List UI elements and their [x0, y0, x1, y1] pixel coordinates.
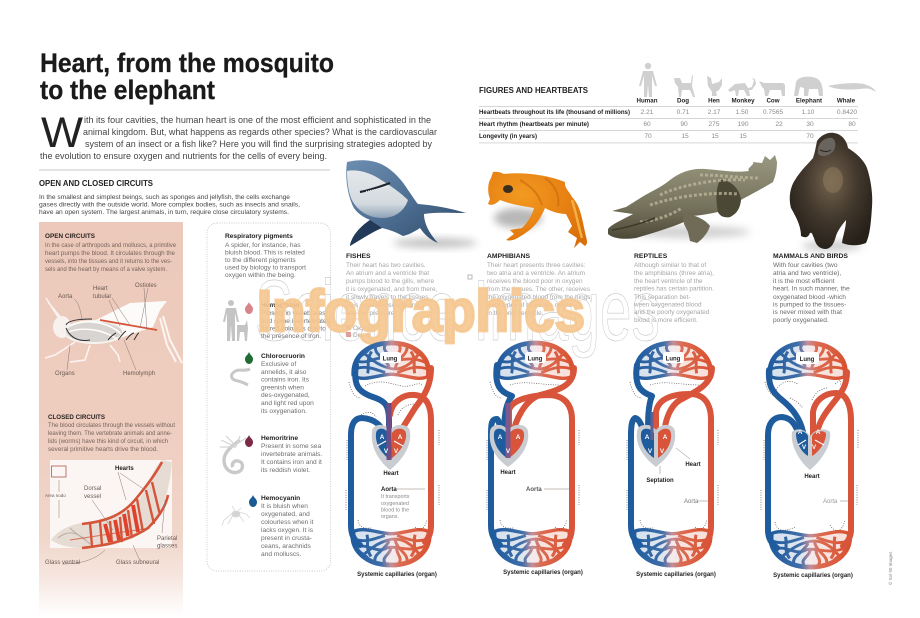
row: longevity: 15 [739, 133, 747, 140]
text block: mammals and birds: is pumped to the tissues- [773, 302, 846, 308]
text block: fishes [346, 253, 438, 317]
photo: gorilla [790, 133, 872, 251]
row: longevity: 15 [711, 133, 719, 140]
text block: amphibians: Both types of blood are mixed [487, 302, 572, 309]
intro paragraph: animal kingdom. But, what happens as regards other species? What is the cardiovascular [83, 127, 438, 138]
text block: mammals and birds: oxygenated blood -which [773, 294, 846, 301]
icon: hemoglobin drop [245, 302, 253, 314]
diagram: mammal circulation [761, 343, 858, 579]
text block: amphibians: the oxygenated blood from the lungs. [487, 294, 592, 301]
label: aorta: Aorta [526, 487, 542, 493]
label: lung: Lung [800, 357, 815, 363]
text block: fishes: This system is simple and [346, 302, 420, 309]
heading: figures and heartbeats: FIGURES AND HEARTBEATS [479, 86, 589, 95]
row: heart rhythm: 22 [775, 121, 783, 128]
label: lung [525, 352, 546, 363]
heading: closed circuits: CLOSED CIRCUITS [48, 414, 106, 421]
text block: open circuits: vessels, into the tissues and it returns to the ves- [45, 258, 172, 265]
labels: earthworm: Dorsal [84, 486, 101, 492]
text block: circuits intro: gases directly with the outside world. More complex bodies, such as insects and snails, [39, 202, 300, 208]
text block: reptiles [633, 253, 714, 324]
text block: hemoglobin: Hemoglobin [261, 302, 299, 309]
text block: chlorocruorin: greenish when [261, 384, 304, 392]
label: aorta: organs. [381, 514, 399, 520]
text block: hemoglobin [261, 302, 332, 340]
diagram: reptile circulation [627, 343, 718, 578]
text block: fishes: Their heart has two cavities. [346, 262, 426, 269]
row: heartbeats throughout life: 0.8420 [837, 109, 857, 116]
watermark [255, 263, 660, 359]
heart: mammal: V [802, 444, 807, 451]
row: longevity: 70 [806, 133, 814, 140]
icon: chlorocruorin drop [245, 352, 253, 364]
text block: open circuits: heart pumps the blood. It circulates through the [45, 250, 175, 257]
row: heart rhythm: 60 [643, 121, 651, 128]
row: longevity: 15 [681, 133, 689, 140]
labels: earthworm: Parietal [157, 536, 177, 542]
legend: Deoxy [353, 332, 372, 339]
title: Heart, from the mosquito [40, 48, 334, 78]
diagram: amphibian circulation [487, 343, 583, 576]
text block: hemocyanin: and molluscs. [261, 551, 301, 558]
label: aorta [526, 487, 569, 493]
text block: reptiles: REPTILES [634, 253, 668, 260]
text block: hemoritrine: its reddish violet. [261, 467, 310, 474]
row: longevity: Longevity (in years) [479, 133, 537, 140]
text block: closed circuits: several primitive hearts drive the blood. [48, 446, 158, 453]
text block: mammals and birds: MAMMALS AND BIRDS [773, 253, 848, 260]
text block: reptiles: Although similar to that of [634, 262, 706, 269]
photo: crocodile [608, 155, 777, 243]
intro paragraph: system of an insect or a fish like? Here you will find the surprising strategies adopted by [85, 139, 432, 150]
label: heart: Heart [383, 471, 399, 477]
text block: hemoritrine: It contains iron and it [261, 459, 322, 466]
heart: reptile: V [648, 448, 653, 455]
column headers: Monkey [731, 98, 755, 104]
label: aorta: Aorta [823, 499, 838, 505]
text block: mammals and birds: heart. In such manner, the [773, 286, 850, 292]
column headers: Whale [837, 98, 856, 104]
title [40, 48, 334, 105]
column headers: Dog [677, 98, 689, 104]
labels: grasshopper [55, 283, 157, 377]
heart: mammal: A [798, 429, 803, 436]
text block: hemoglobin: Its red colour is due to [261, 326, 326, 332]
text block: hemocyanin: Hemocyanin [261, 495, 300, 502]
row: heartbeats throughout life: 2.17 [708, 109, 721, 116]
row: heart rhythm: 275 [708, 121, 720, 128]
labels: earthworm: vessel [84, 494, 101, 500]
text block: hemoritrine [261, 435, 322, 474]
arrows: flow [627, 382, 718, 530]
label: heart: Heart [804, 474, 820, 480]
label: aorta: Aorta [684, 499, 699, 505]
text block: chlorocruorin: contains iron. Its [261, 376, 310, 384]
text block: hemocyanin: present in crusta- [261, 535, 312, 542]
text block: respiratory pigments [225, 233, 306, 279]
label: aorta: It transports [381, 494, 410, 500]
column headers: Cow [766, 98, 780, 104]
intro paragraph [40, 109, 438, 162]
heart: fish: V [394, 448, 399, 455]
row: heart rhythm: 190 [737, 121, 749, 128]
heart: mammal: A [816, 429, 821, 436]
icon: marine worm silhouette [220, 436, 246, 472]
labels: grasshopper: Aorta [58, 294, 73, 300]
text block: respiratory pigments: A spider, for instance, has [225, 242, 301, 249]
text block: respiratory pigments: to the different pigments [225, 257, 296, 264]
icon: hemocyanin drop [249, 495, 257, 507]
labels: grasshopper: Hemolymph [123, 371, 155, 377]
label: aorta [684, 499, 710, 505]
text block: reptiles: This separation bet- [634, 294, 690, 301]
arrows: flow [346, 382, 439, 530]
heart: fish: V [384, 448, 389, 455]
icon: human and dog silhouette [223, 300, 248, 341]
heart: fish: A [380, 434, 385, 441]
text block: fishes: An atrium and a ventricle that [346, 270, 429, 277]
text block: open circuits [45, 242, 176, 273]
text block: amphibians: from the tissues. The other, receives [487, 286, 590, 293]
title: to the elephant [40, 75, 215, 105]
icon: small marker [468, 275, 472, 279]
text block: open circuits: sels and the heart by means of a valve system. [45, 266, 167, 273]
label: lung [663, 352, 684, 363]
text block: chlorocruorin: annelids, it also [261, 369, 307, 376]
row: longevity [479, 133, 814, 140]
label: septation: Septation [646, 478, 674, 484]
credit: © Sol 90 Images [887, 551, 893, 585]
row: longevity: 70 [644, 133, 652, 140]
label: systemic capillaries: Systemic capillaries (organ) [773, 573, 853, 579]
heart: reptile: A [645, 434, 650, 441]
legend: Oxygen [353, 325, 375, 332]
text block: amphibians: Their heart presents three cavities: [487, 262, 586, 269]
heart: reptile: A [663, 434, 668, 441]
text block: chlorocruorin: and light red upon [261, 400, 314, 407]
column headers: Hen [708, 98, 720, 104]
icons: animal silhouettes [639, 63, 876, 97]
text block: mammals and birds: poorly oxygenated. [773, 317, 829, 324]
labels: earthworm: Area nodo [45, 493, 66, 498]
text block: hemoglobin: Present in vertebrates [261, 310, 326, 317]
row: heart rhythm: 80 [848, 121, 856, 128]
text block: hemoritrine: Hemoritrine [261, 435, 298, 442]
row: heartbeats throughout life: 0.71 [677, 109, 690, 116]
heart: amphibian: A [498, 434, 503, 441]
row: heartbeats throughout life: 1.50 [736, 109, 749, 116]
column headers [637, 98, 856, 104]
text block: chlorocruorin: Chlorocruorin [261, 353, 305, 360]
label: heart [676, 448, 701, 468]
labels: grasshopper: Heart [93, 286, 108, 292]
text block: circuits intro: have an open system. The largest animals, in turn, require close circulatory systems. [39, 209, 289, 216]
text block: reptiles: blood is more efficient. [634, 317, 698, 324]
text block: closed circuits: leaving them. The vertebrate animals and anne- [48, 430, 172, 437]
text block: fishes: has low pressure. [346, 310, 396, 317]
text block: closed circuits [48, 422, 175, 453]
text block: hemocyanin [261, 495, 314, 558]
text block: hemocyanin: lacks oxygen. It is [261, 527, 314, 534]
row: heartbeats throughout life [479, 109, 857, 116]
text block: mammals and birds: is never mixed with that [773, 309, 842, 316]
labels: earthworm: Glass subneural [116, 560, 159, 566]
text block: amphibians: AMPHIBIANS [487, 253, 531, 260]
row: heart rhythm: 90 [680, 121, 688, 128]
text block: chlorocruorin: Exclusive of [261, 361, 296, 368]
text block: closed circuits: The blood circulates through the vessels without [48, 422, 175, 429]
text block: respiratory pigments: Respiratory pigments [225, 233, 293, 240]
text block: hemocyanin: It is bluish when [261, 503, 308, 510]
text block: fishes: it slowly travels to the tissues. [346, 294, 430, 301]
text block: reptiles: reptiles has certain partition. [634, 286, 714, 292]
label: aorta: Aorta [381, 487, 397, 493]
label: systemic capillaries: Systemic capillaries (organ) [357, 572, 437, 578]
labels: earthworm: Hearts [115, 466, 134, 472]
text block: hemoglobin: the presence of iron. [261, 333, 321, 340]
labels: earthworm: glasses [157, 544, 177, 550]
column headers: Elephant [796, 98, 822, 104]
diagram: fish circulation [346, 343, 439, 578]
text block: mammals and birds: With four cavities (two [773, 262, 838, 269]
text block: hemocyanin: colourless when it [261, 519, 314, 526]
heading: open and closed circuits: OPEN AND CLOSED CIRCUITS [39, 179, 154, 188]
label: aorta: oxygenated [381, 501, 409, 507]
text block: amphibians: in the only ventricle. [487, 310, 544, 317]
legend [346, 325, 375, 339]
text block: circuits intro: In the smallest and simplest beings, such as sponges and jellyfish, the cells exchange [39, 194, 290, 201]
heart: amphibian: V [506, 448, 511, 455]
text block: hemoglobin: and some invertebrates. [261, 318, 332, 325]
text block: hemoritrine: Present in some sea [261, 443, 321, 450]
row: heart rhythm: Heart rhythm (heartbeats per minute) [479, 121, 589, 128]
intro paragraph: the evolution to ensure oxygen and nutrients for the cells of every being. [40, 151, 327, 162]
label: lung [380, 352, 401, 363]
text block: respiratory pigments: bluish blood. This is related [225, 250, 305, 256]
text block: hemoritrine: invertebrate animals. [261, 451, 322, 458]
label: systemic capillaries: Systemic capillaries (organ) [636, 572, 716, 578]
labels: grasshopper: Ostioles [135, 283, 157, 289]
heart: fish: A [398, 434, 403, 441]
heart: amphibian [490, 403, 528, 467]
icon: detail box [52, 466, 66, 477]
row: heart rhythm: 30 [806, 121, 814, 128]
text block: respiratory pigments: oxygen within the being. [225, 272, 296, 279]
label: systemic capillaries: Systemic capillaries (organ) [503, 570, 583, 576]
text block: fishes: FISHES [346, 253, 371, 260]
illustration: earthworm closed circuit [45, 460, 177, 566]
text block: circuits intro [39, 194, 300, 216]
label: lung: Lung [383, 356, 398, 362]
label: heart: Heart [500, 470, 516, 476]
text block: chlorocruorin [261, 353, 314, 415]
heart: fish [372, 403, 410, 470]
text block: amphibians: two atria and a ventricle. An atrium [487, 270, 585, 277]
arrows: flow [487, 382, 579, 530]
text block: chlorocruorin: its oxygenation. [261, 408, 307, 415]
text block: reptiles: the heart ventricle of the [634, 278, 703, 285]
watermark: Science Images [255, 263, 660, 359]
row: heartbeats throughout life: Heartbeats throughout its life (thousand of millions) [479, 109, 630, 116]
photo: shark [346, 160, 477, 248]
column headers: Human [637, 98, 658, 104]
illustration: grasshopper [45, 283, 182, 377]
label: heart: Heart [685, 462, 701, 468]
panel: respiratory pigments [207, 223, 332, 571]
heart: amphibian: A [516, 434, 521, 441]
icon: worm silhouette [231, 369, 250, 385]
heading: open circuits: OPEN CIRCUITS [45, 233, 96, 240]
text block: mammals and birds: it is the most efficient [773, 278, 835, 285]
intro paragraph: W [41, 109, 83, 157]
labels: earthworm [45, 466, 177, 566]
text block: fishes: it is oxygenated, and from there, [346, 286, 438, 293]
text block: reptiles: the amphibians (three atria), [634, 270, 714, 277]
panel: open and closed circuits [39, 222, 183, 616]
labels: earthworm: Glass ventral [45, 560, 80, 566]
text block: fishes: pumps blood to the gills, where [346, 278, 435, 285]
intro paragraph: ith its four cavities, the human heart is one of the most efficient and sophisticated in the [84, 115, 431, 126]
row: heartbeats throughout life: 1.10 [802, 109, 815, 116]
text block: hemocyanin: oxygenated, and [261, 511, 310, 518]
heart: reptile [637, 412, 675, 474]
text block: reptiles: ween oxygenated blood [633, 302, 702, 308]
row: heart rhythm [479, 121, 856, 128]
text block: respiratory pigments: used by biology to transport [225, 264, 306, 272]
heart: mammal: V [812, 444, 817, 451]
photo: frog [488, 172, 587, 248]
text block: closed circuits: lids (worms) have this kind of circuit, in which [48, 438, 168, 445]
labels: grasshopper: Organs [55, 371, 75, 377]
label: aorta: blood to the [381, 508, 409, 514]
text block: chlorocruorin: des-oxygenated, [261, 392, 310, 399]
text block: reptiles: and the poorly oxygenated [634, 309, 710, 316]
text block: amphibians [487, 253, 592, 317]
label: lung: Lung [666, 356, 681, 362]
label: aorta [381, 487, 425, 520]
text block: amphibians: receives the blood poor in oxygen [487, 278, 583, 285]
icon: hemoritrine drop [245, 435, 253, 447]
icon: spider silhouette [222, 506, 250, 526]
heart: reptile: V [660, 448, 665, 455]
table: figures and heartbeats [479, 63, 876, 143]
watermark: Infographics [257, 279, 585, 344]
labels: grasshopper: tubular [93, 294, 111, 300]
row: heartbeats throughout life: 2.21 [641, 109, 654, 116]
text block: mammals and birds: atria and two ventricle), [773, 270, 841, 277]
text block: hemocyanin: ceans, arachnids [261, 543, 312, 550]
heart: mammal [792, 429, 830, 470]
text block: open circuits: In the case of arthropods and molluscs, a primitive [45, 242, 176, 249]
row: heartbeats throughout life: 0.7565 [763, 109, 783, 116]
label: lung: Lung [528, 356, 543, 362]
label: aorta [823, 499, 849, 505]
arrows: flow [761, 380, 858, 530]
text block: mammals and birds [773, 253, 850, 324]
label: lung [796, 352, 819, 364]
